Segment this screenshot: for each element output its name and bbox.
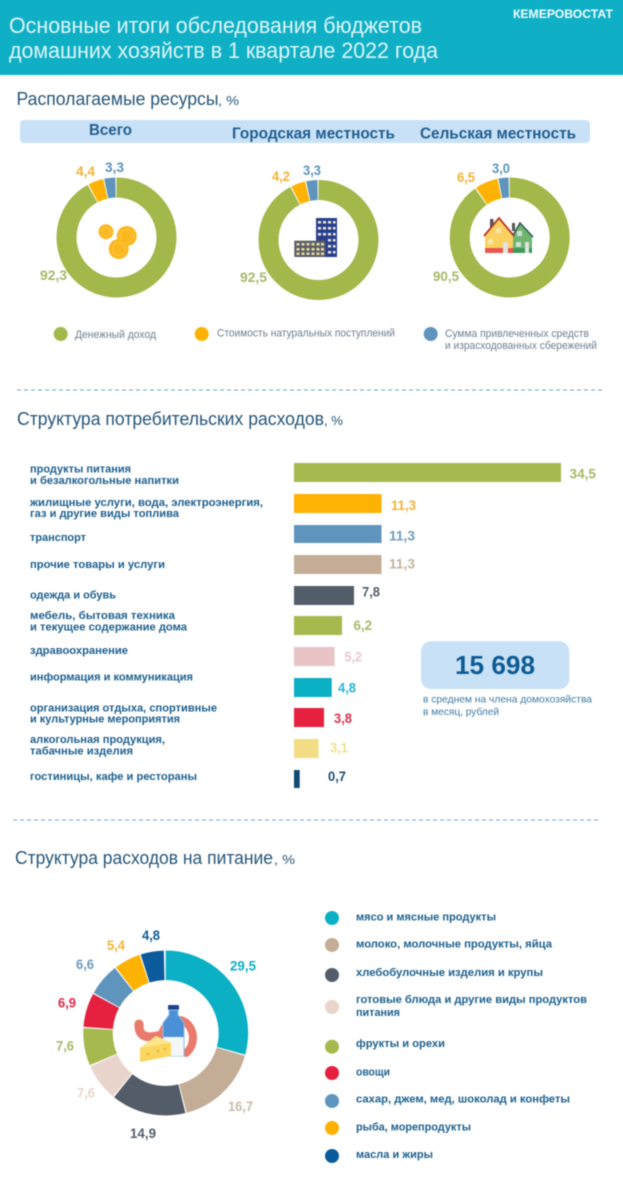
bar chart: 4,8 <box>338 681 356 696</box>
category labels: и культурные мероприятия <box>30 714 180 726</box>
column header band: Всего <box>89 122 132 139</box>
category labels: и безалкогольные напитки <box>30 475 179 487</box>
heading: spending: , % <box>324 413 343 428</box>
heading: food: , % <box>274 852 295 867</box>
icon: food <box>139 1005 193 1062</box>
donut: total: 4,4 <box>76 164 95 179</box>
icon: houses <box>484 218 533 253</box>
agency name: КЕМЕРОВОСТАТ <box>513 7 614 21</box>
legend: food categories: готовые блюда и другие виды продуктов <box>356 994 587 1006</box>
category labels: продукты питания <box>30 464 131 476</box>
donut: urban: 3,3 <box>303 163 321 178</box>
callout: average spending: 15 698 <box>455 650 535 680</box>
legend: food categories: питания <box>356 1007 400 1019</box>
donut: food: 4,8 <box>142 928 160 943</box>
legend: food categories: хлебобулочные изделия и крупы <box>356 967 543 979</box>
donut: rural: 3,0 <box>492 161 510 176</box>
bar chart: 11,3 <box>391 498 416 513</box>
icon: coins <box>98 224 137 259</box>
category labels: организация отдыха, спортивные <box>30 702 217 714</box>
donut: food: 14,9 <box>130 1126 156 1141</box>
category labels: жилищные услуги, вода, электроэнергия, <box>29 497 263 509</box>
heading: resources: Располагаемые ресурсы <box>16 88 218 109</box>
header banner <box>0 0 623 75</box>
legend: food categories: мясо и мясные продукты <box>356 912 496 924</box>
category labels: газ и другие виды топлива <box>30 508 180 520</box>
donut: rural: 6,5 <box>457 170 475 185</box>
bar chart: 5,2 <box>344 650 362 665</box>
category labels: прочие товары и услуги <box>30 559 165 571</box>
legend: resources: Стоимость натуральных поступлений <box>217 328 395 340</box>
column header band: Городская местность <box>232 126 395 142</box>
title: домашних хозяйств в 1 квартале 2022 года <box>9 38 439 63</box>
bar chart: 3,8 <box>334 711 352 726</box>
category labels: табачные изделия <box>30 746 133 758</box>
donut: urban: 92,5 <box>240 270 267 285</box>
category labels: здравоохранение <box>30 645 128 657</box>
donut: total: 92,3 <box>40 268 67 283</box>
legend: food categories: рыба, морепродукты <box>356 1122 471 1134</box>
legend: food categories: фрукты и орехи <box>356 1038 445 1050</box>
donut: rural: 90,5 <box>433 269 459 284</box>
donut: urban: 4,2 <box>272 169 290 184</box>
legend: food categories <box>325 911 587 1163</box>
column header band: Сельская местность <box>420 126 576 142</box>
panel: consumer spending structure <box>17 408 596 788</box>
heading: resources: , % <box>218 93 239 108</box>
icon: city buildings <box>294 218 337 257</box>
bar chart: 0,7 <box>328 769 346 784</box>
donut: rural <box>433 161 560 288</box>
donut: food: 5,4 <box>107 938 125 953</box>
donut: food: 6,9 <box>58 996 76 1011</box>
title <box>9 13 439 63</box>
bar chart: 11,3 <box>389 529 415 544</box>
bar chart: 34,5 <box>570 466 596 482</box>
category labels: гостиницы, кафе и рестораны <box>30 771 197 783</box>
column header band <box>20 120 590 143</box>
legend: resources: Сумма привлеченных средств <box>445 328 589 340</box>
callout: average spending <box>421 641 592 718</box>
donut: food: 6,6 <box>76 957 94 972</box>
category labels: и текущее содержание дома <box>30 622 188 634</box>
donut: food <box>56 928 256 1141</box>
donut: food: 7,6 <box>77 1086 95 1101</box>
donut: total <box>40 160 166 288</box>
legend: resources: Денежный доход <box>75 329 157 341</box>
legend: resources: и израсходованных сбережений <box>445 340 597 352</box>
panel: available resources <box>16 88 597 352</box>
bar chart: 3,1 <box>330 741 348 756</box>
donut: food: 7,6 <box>56 1039 74 1054</box>
heading: food: Структура расходов на питание <box>15 847 273 868</box>
category labels: одежда и обувь <box>30 590 116 602</box>
callout: average spending: в среднем на члена домохозяйства <box>423 694 592 706</box>
bar chart <box>294 463 596 788</box>
bar chart: 6,2 <box>354 618 372 633</box>
legend: resources <box>54 327 597 352</box>
legend: food categories: овощи <box>356 1067 390 1079</box>
legend: food categories: масла и жиры <box>356 1149 433 1161</box>
donut: total: 3,3 <box>105 160 124 175</box>
category labels: транспорт <box>30 532 87 544</box>
legend: food categories: молоко, молочные продукты, яйца <box>356 939 553 951</box>
panel: food spending structure <box>15 847 587 1163</box>
donut: urban <box>240 163 368 290</box>
category labels: информация и коммуникация <box>30 672 193 684</box>
legend: food categories: сахар, джем, мед, шоколад и конфеты <box>356 1094 570 1106</box>
heading: spending: Структура потребительских расходов <box>17 408 324 429</box>
category labels: алкогольная продукция, <box>30 734 165 746</box>
callout: average spending: в месяц, рублей <box>423 706 499 718</box>
category labels: мебель, бытовая техника <box>30 610 176 622</box>
category labels <box>29 464 263 783</box>
bar chart: 11,3 <box>389 556 415 572</box>
bar chart: 7,8 <box>362 585 380 600</box>
title: Основные итоги обследования бюджетов <box>9 13 422 38</box>
donut: food: 16,7 <box>228 1099 253 1114</box>
donut: food: 29,5 <box>230 959 256 974</box>
